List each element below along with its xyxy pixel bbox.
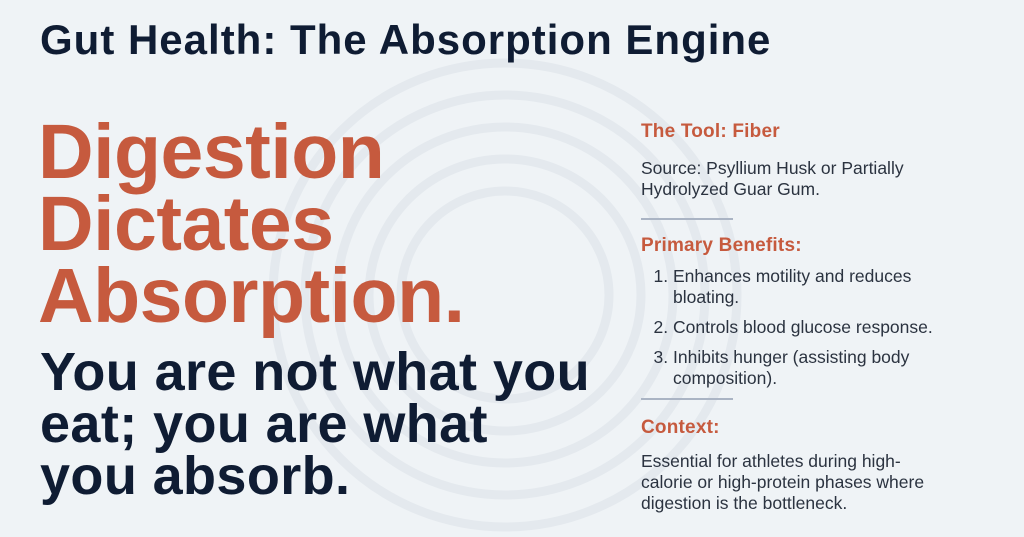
- subheadline: You are not what you: [40, 342, 590, 402]
- text: source: Source: Psyllium Husk or Partially Hydrolyzed Guar Gum.: [641, 158, 904, 199]
- subheadline: eat; you are what: [40, 394, 488, 454]
- text: context: [641, 451, 924, 513]
- heading: context: Context:: [641, 417, 720, 438]
- text: context: digestion is the bottleneck.: [641, 493, 847, 513]
- subheadline: [40, 342, 590, 506]
- headline: Absorption.: [38, 253, 464, 339]
- headline: Digestion: [38, 109, 384, 195]
- list: benefits: Inhibits hunger (assisting body composition).: [673, 347, 909, 388]
- headline: [38, 109, 464, 339]
- text: context: calorie or high-protein phases where: [641, 472, 924, 492]
- heading: tool: The Tool: Fiber: [641, 121, 780, 142]
- list: benefits: [654, 266, 933, 388]
- headline: Dictates: [38, 181, 334, 267]
- panel: fiber details: [641, 121, 933, 513]
- subheadline: you absorb.: [40, 446, 350, 506]
- heading: benefits: Primary Benefits:: [641, 235, 802, 256]
- list: benefits: Controls blood glucose response.: [673, 317, 933, 337]
- title: Gut Health: The Absorption Engine: [40, 16, 771, 63]
- list: benefits: Enhances motility and reduces bloating.: [673, 266, 911, 307]
- text: context: Essential for athletes during high-: [641, 451, 901, 471]
